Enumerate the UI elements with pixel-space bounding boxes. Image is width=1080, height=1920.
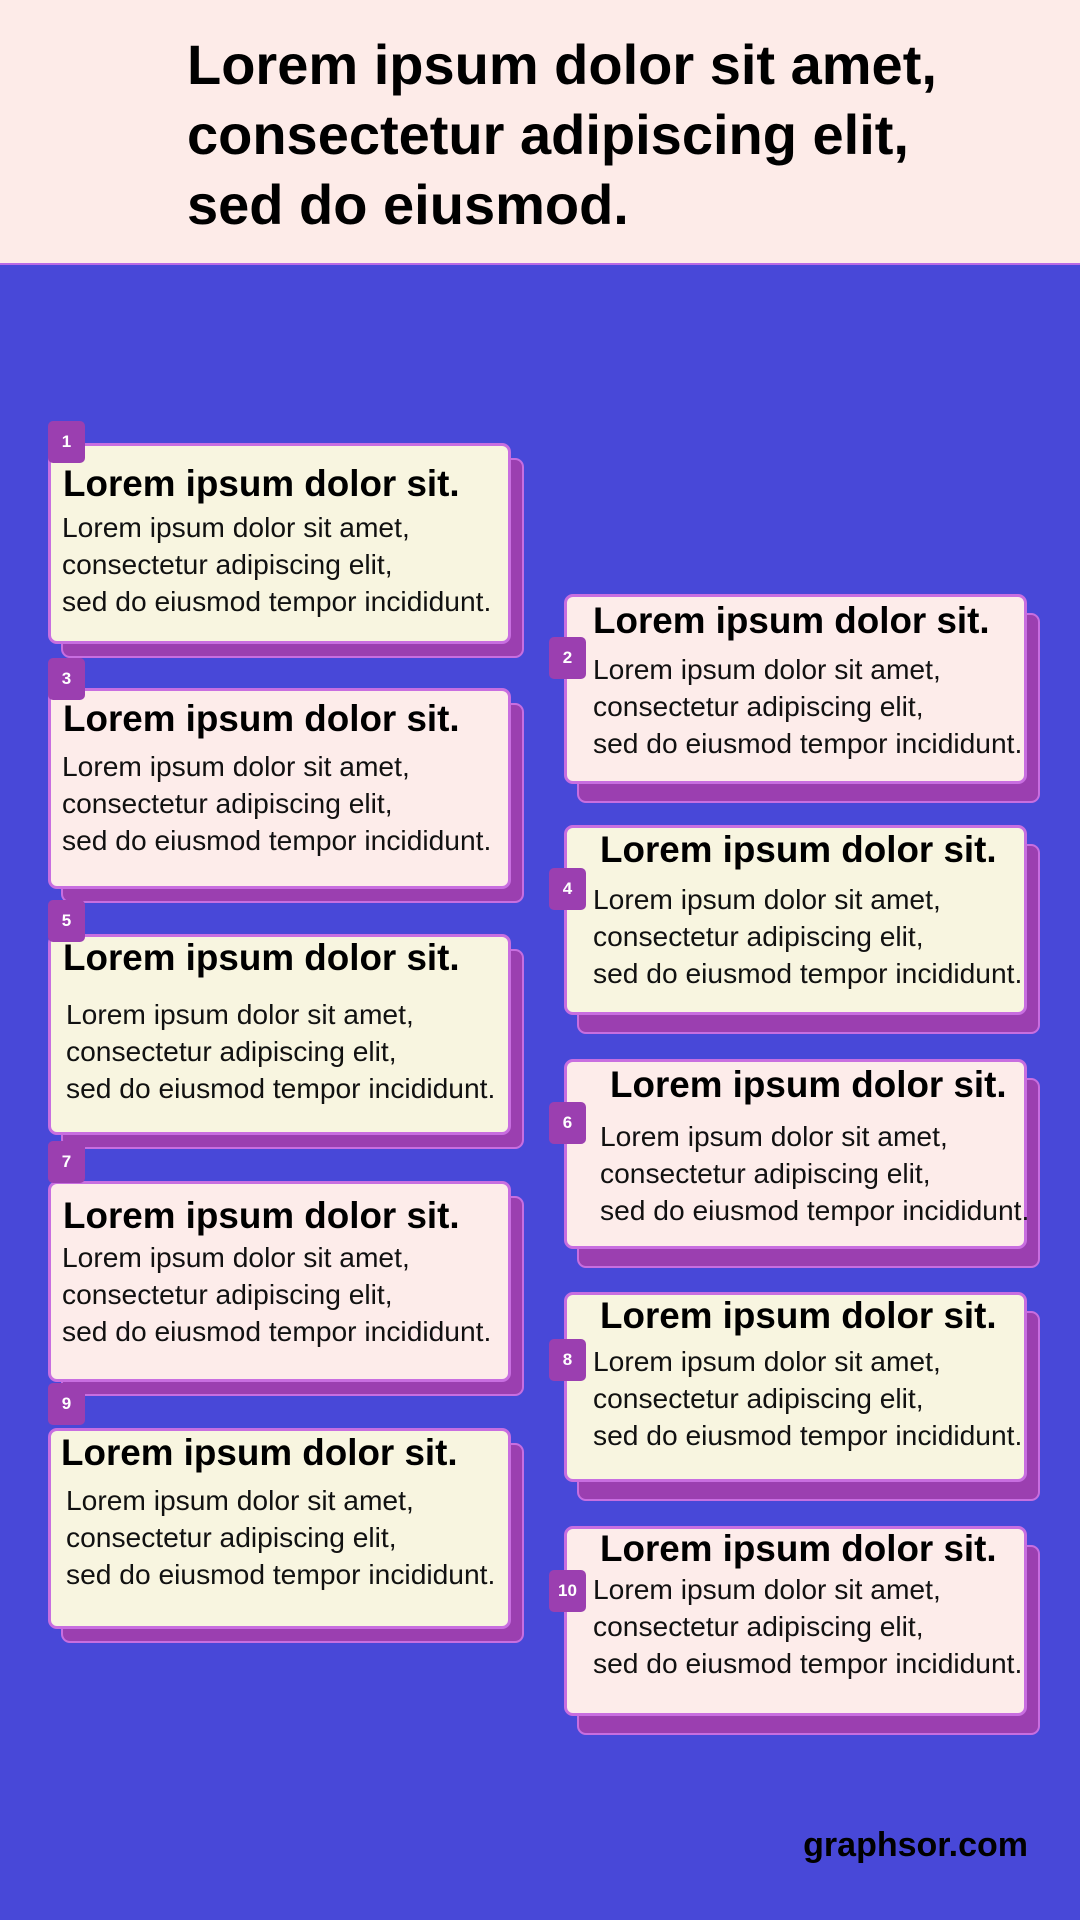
badge 4 bbox=[549, 868, 586, 910]
title bbox=[187, 33, 937, 236]
heading 8: Lorem ipsum dolor sit. bbox=[600, 1295, 997, 1336]
text 1: Lorem ipsum dolor sit amet, bbox=[62, 511, 410, 543]
heading 10: Lorem ipsum dolor sit. bbox=[600, 1528, 997, 1569]
panel: item 2 bbox=[549, 594, 1040, 803]
badge 8: 8 bbox=[563, 1350, 572, 1369]
text 5: Lorem ipsum dolor sit amet, bbox=[66, 998, 414, 1030]
text 4: consectetur adipiscing elit, bbox=[593, 920, 924, 952]
title: Lorem ipsum dolor sit amet, bbox=[187, 33, 937, 96]
text 2 bbox=[593, 653, 1022, 759]
text 3: consectetur adipiscing elit, bbox=[62, 787, 393, 819]
panel: item 5 bbox=[48, 900, 524, 1149]
badge 5 bbox=[48, 900, 85, 942]
heading 1: Lorem ipsum dolor sit. bbox=[63, 463, 460, 504]
panel: item 8 bbox=[549, 1292, 1040, 1501]
text 4: Lorem ipsum dolor sit amet, bbox=[593, 883, 941, 915]
text 7: sed do eiusmod tempor incididunt. bbox=[62, 1315, 491, 1347]
panel: item 10 bbox=[549, 1526, 1040, 1735]
text 6: Lorem ipsum dolor sit amet, bbox=[600, 1120, 948, 1152]
text 7 bbox=[62, 1241, 491, 1347]
badge 2 bbox=[549, 637, 586, 679]
heading 4: Lorem ipsum dolor sit. bbox=[600, 829, 997, 870]
panel: item 4 bbox=[549, 825, 1040, 1034]
text 2: Lorem ipsum dolor sit amet, bbox=[593, 653, 941, 685]
badge 1 bbox=[48, 421, 85, 463]
text 8: sed do eiusmod tempor incididunt. bbox=[593, 1419, 1022, 1451]
badge 6 bbox=[549, 1102, 586, 1144]
text 2: sed do eiusmod tempor incididunt. bbox=[593, 727, 1022, 759]
panel: item 7 bbox=[48, 1141, 524, 1396]
heading 5: Lorem ipsum dolor sit. bbox=[63, 937, 460, 978]
header bbox=[0, 0, 1080, 265]
title: consectetur adipiscing elit, bbox=[187, 103, 909, 166]
panel: item 9 bbox=[48, 1383, 524, 1643]
panel: item 1 bbox=[48, 421, 524, 658]
text 1 bbox=[62, 511, 491, 617]
text 10 bbox=[593, 1573, 1022, 1679]
text 4: sed do eiusmod tempor incididunt. bbox=[593, 957, 1022, 989]
title: sed do eiusmod. bbox=[187, 173, 629, 236]
badge 9: 9 bbox=[62, 1394, 71, 1413]
text 3: sed do eiusmod tempor incididunt. bbox=[62, 824, 491, 856]
text 3 bbox=[62, 750, 491, 856]
text 10: consectetur adipiscing elit, bbox=[593, 1610, 924, 1642]
badge 7: 7 bbox=[62, 1152, 71, 1171]
text 8 bbox=[593, 1345, 1022, 1451]
text 10: Lorem ipsum dolor sit amet, bbox=[593, 1573, 941, 1605]
text 9: Lorem ipsum dolor sit amet, bbox=[66, 1484, 414, 1516]
text 8: consectetur adipiscing elit, bbox=[593, 1382, 924, 1414]
text 4 bbox=[593, 883, 1022, 989]
badge 7 bbox=[48, 1141, 85, 1183]
text 5: consectetur adipiscing elit, bbox=[66, 1035, 397, 1067]
badge 2: 2 bbox=[563, 648, 572, 667]
badge 5: 5 bbox=[62, 911, 71, 930]
text 1: consectetur adipiscing elit, bbox=[62, 548, 393, 580]
text 6: consectetur adipiscing elit, bbox=[600, 1157, 931, 1189]
badge 10: 10 bbox=[558, 1581, 577, 1600]
badge 6: 6 bbox=[563, 1113, 572, 1132]
text 5: sed do eiusmod tempor incididunt. bbox=[66, 1072, 495, 1104]
heading 9: Lorem ipsum dolor sit. bbox=[61, 1432, 458, 1473]
text 2: consectetur adipiscing elit, bbox=[593, 690, 924, 722]
panel: item 3 bbox=[48, 658, 524, 903]
heading 3: Lorem ipsum dolor sit. bbox=[63, 698, 460, 739]
text 9: consectetur adipiscing elit, bbox=[66, 1521, 397, 1553]
text 5 bbox=[66, 998, 495, 1104]
text 8: Lorem ipsum dolor sit amet, bbox=[593, 1345, 941, 1377]
text 6 bbox=[600, 1120, 1029, 1226]
badge 8 bbox=[549, 1339, 586, 1381]
text 9: sed do eiusmod tempor incididunt. bbox=[66, 1558, 495, 1590]
heading 2: Lorem ipsum dolor sit. bbox=[593, 600, 990, 641]
badge 3 bbox=[48, 658, 85, 700]
panel: item 6 bbox=[549, 1059, 1040, 1268]
badge 3: 3 bbox=[62, 669, 71, 688]
footer: brand: graphsor.com bbox=[803, 1826, 1028, 1864]
text 6: sed do eiusmod tempor incididunt. bbox=[600, 1194, 1029, 1226]
text 10: sed do eiusmod tempor incididunt. bbox=[593, 1647, 1022, 1679]
heading 6: Lorem ipsum dolor sit. bbox=[610, 1064, 1007, 1105]
text 3: Lorem ipsum dolor sit amet, bbox=[62, 750, 410, 782]
heading 7: Lorem ipsum dolor sit. bbox=[63, 1195, 460, 1236]
badge 9 bbox=[48, 1383, 85, 1425]
text 7: consectetur adipiscing elit, bbox=[62, 1278, 393, 1310]
text 1: sed do eiusmod tempor incididunt. bbox=[62, 585, 491, 617]
badge 4: 4 bbox=[563, 879, 572, 898]
text 9 bbox=[66, 1484, 495, 1590]
badge 1: 1 bbox=[62, 432, 71, 451]
badge 10 bbox=[549, 1570, 586, 1612]
text 7: Lorem ipsum dolor sit amet, bbox=[62, 1241, 410, 1273]
